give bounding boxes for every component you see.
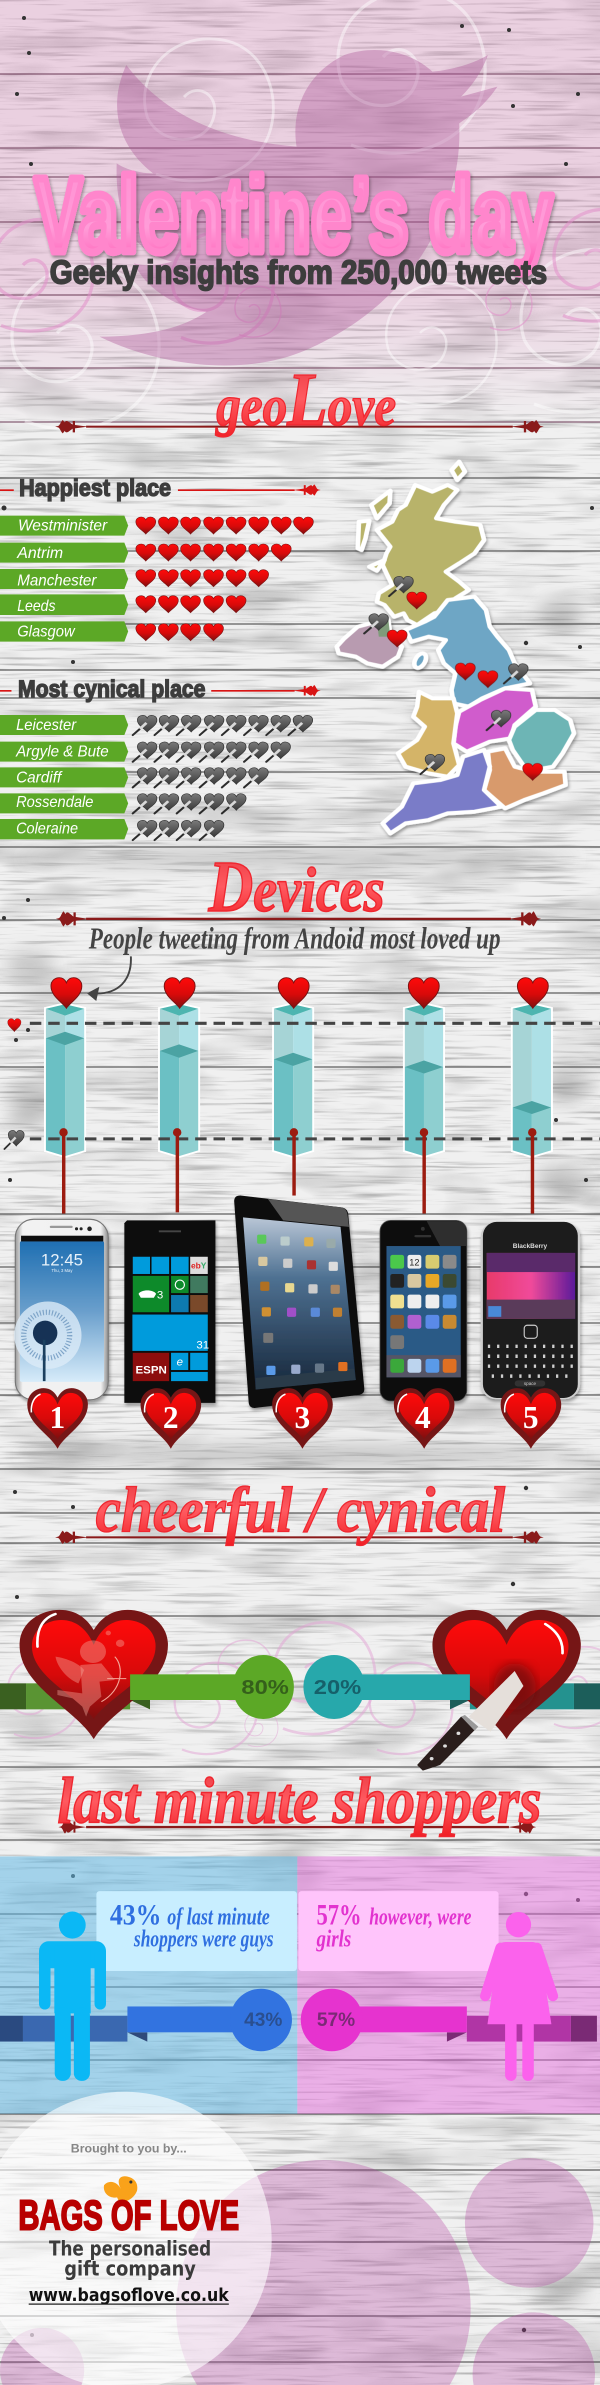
divider: Devices <box>56 911 541 927</box>
cheerful back ribbon <box>0 1683 150 1709</box>
UK map <box>337 462 574 833</box>
cheerful bar <box>130 1655 294 1719</box>
broken hearts row 7 <box>133 742 290 762</box>
section: Devices <box>4 846 600 1449</box>
twitter bird silhouette <box>99 50 497 365</box>
label: Antrim: Antrim <box>16 543 63 562</box>
phone: iPad mini <box>234 1196 364 1408</box>
hearts row 7 <box>136 544 291 561</box>
label: Coleraine <box>0 818 128 839</box>
label: Rossendale <box>0 792 128 813</box>
guys text box <box>96 1891 297 1971</box>
brought to you by: Brought to you by... <box>71 2143 187 2155</box>
rank heart 3: 3 <box>294 1400 310 1435</box>
label: Leeds <box>0 594 128 615</box>
dashed scale lines <box>30 1023 600 1139</box>
label: Leeds: Leeds <box>17 596 56 615</box>
phone: Windows: e <box>177 1356 183 1368</box>
phone: Windows: 31 <box>196 1340 209 1352</box>
website url: www.bagsoflove.co.uk <box>29 2286 230 2306</box>
label: Cardiff: Cardiff <box>16 768 63 786</box>
heart with knife <box>432 1610 581 1739</box>
heart with cupid <box>20 1610 168 1739</box>
label: Leicester <box>0 715 128 735</box>
heading: most cynical place: Most cynical place <box>18 677 205 703</box>
girls bar <box>301 1989 467 2051</box>
phone: Samsung <box>14 1219 108 1400</box>
phone: Windows: ebY <box>191 1261 207 1271</box>
map: Isle of Man <box>412 652 428 669</box>
girls bar: 57% <box>317 2010 355 2031</box>
guys bar <box>127 1989 292 2051</box>
divider <box>59 1821 536 1834</box>
label: Glasgow <box>0 621 128 642</box>
heading: Devices: Devices <box>208 846 385 927</box>
heading: happiest place <box>0 476 321 502</box>
map: South West <box>383 750 501 833</box>
rank heart 4 <box>394 1388 454 1449</box>
broken hearts row 8 <box>133 715 313 735</box>
hearts row 4 <box>136 624 223 641</box>
cupid <box>55 1631 126 1717</box>
panel: girls <box>297 1856 600 2114</box>
woman icon <box>485 1912 553 2081</box>
guys text box: 43% <box>110 1899 161 1932</box>
logo: Bags of Love: BAGS OF LOVE <box>18 2191 239 2238</box>
map: Northern Ireland <box>337 620 402 667</box>
rank heart 1 <box>27 1388 88 1449</box>
tagline: gift company <box>64 2257 196 2281</box>
bar: device 4 <box>405 1004 443 1156</box>
cynical back ribbon <box>450 1683 600 1709</box>
guys text box: of last minute <box>167 1905 270 1931</box>
phone: iPhone <box>380 1220 467 1401</box>
top hearts <box>51 978 548 1008</box>
phone: Windows: ESPN <box>135 1364 167 1376</box>
phone: iPhone: 12 <box>409 1258 420 1268</box>
broken hearts row 4 <box>133 820 224 840</box>
label: Leicester: Leicester <box>16 715 77 734</box>
label: Glasgow: Glasgow <box>17 621 76 640</box>
map: Midlands <box>453 688 536 752</box>
map: Wales <box>398 692 459 777</box>
guys back ribbon <box>0 2016 147 2042</box>
phone: Windows <box>124 1220 215 1403</box>
section: last minute shoppers <box>0 1765 600 2385</box>
rank heart 5 <box>501 1388 561 1449</box>
bar: device 2 <box>160 1004 198 1156</box>
cheerful bar: 80% <box>241 1675 289 1699</box>
divider: geoLove <box>55 420 544 433</box>
hearts row 8 <box>136 517 313 534</box>
girls text box <box>298 1891 499 1971</box>
phone: BlackBerry <box>481 1222 580 1399</box>
label: Manchester: Manchester <box>17 570 98 589</box>
tagline: The personalised <box>49 2237 211 2261</box>
panel: guys <box>0 1856 297 2114</box>
phone: Samsung: 12:45 <box>41 1251 83 1270</box>
rank heart 1: 1 <box>50 1400 65 1435</box>
decorative swirls <box>0 0 600 1754</box>
broken hearts row 6 <box>133 768 268 787</box>
rank heart 2: 2 <box>163 1400 179 1435</box>
phone: BlackBerry: space <box>524 1381 537 1386</box>
map: South East <box>484 748 566 808</box>
heading: geoLove: geoLove <box>215 356 396 442</box>
label: Antrim <box>0 543 128 563</box>
label: Westminister: Westminister <box>18 516 108 534</box>
rank heart 5: 5 <box>523 1400 539 1435</box>
connector stems <box>59 1128 536 1214</box>
map: Antrim <box>377 620 390 637</box>
rank heart 2 <box>141 1388 201 1449</box>
hearts row 5 <box>136 596 246 613</box>
map pins <box>364 576 543 780</box>
girls text box: however, were <box>369 1905 472 1931</box>
cynical bar: 20% <box>314 1675 361 1699</box>
section: cheerful / cynical <box>0 1475 600 1771</box>
scale icons <box>4 1019 24 1149</box>
bar: device 5 <box>513 1004 551 1156</box>
rank heart 4: 4 <box>415 1400 431 1435</box>
map: Northern England <box>406 597 530 707</box>
divider <box>55 1531 544 1544</box>
guys text box: shoppers were guys <box>133 1927 274 1953</box>
heading: last minute shoppers <box>57 1765 541 1837</box>
section: geoLove <box>0 462 574 840</box>
phone: BlackBerry: BlackBerry <box>513 1243 548 1250</box>
bar: device 3 <box>274 1004 312 1156</box>
label: Rossendale: Rossendale <box>16 792 93 811</box>
label: Manchester <box>0 569 128 589</box>
map: East Anglia <box>509 710 574 770</box>
phone: Windows: 3 <box>157 1289 163 1301</box>
rank heart 3 <box>272 1388 333 1449</box>
heading: happiest place: Happiest place <box>19 476 171 502</box>
arrow <box>89 956 131 999</box>
guys bar: 43% <box>244 2010 282 2031</box>
girls text box: 57% <box>316 1899 362 1932</box>
footer pink circles <box>0 2158 595 2385</box>
logo: Bags of Love <box>18 2176 239 2238</box>
cynical bar <box>303 1655 470 1719</box>
hearts row 6 <box>136 570 269 587</box>
phone: Samsung: Thu, 3 May <box>52 1268 73 1273</box>
broken hearts row 5 <box>133 794 246 813</box>
map: Scotland <box>358 462 484 625</box>
tagline <box>49 2237 211 2281</box>
girls back ribbon <box>447 2016 597 2042</box>
label: Coleraine: Coleraine <box>16 818 78 837</box>
knife <box>417 1671 523 1771</box>
label: Argyle & Bute: Argyle & Bute <box>15 742 109 760</box>
label: Cardiff <box>0 767 128 787</box>
bar: device 1 <box>46 1004 84 1156</box>
man icon <box>39 1912 106 2081</box>
footer white circle <box>0 2092 272 2385</box>
girls text box: girls <box>316 1927 351 1953</box>
